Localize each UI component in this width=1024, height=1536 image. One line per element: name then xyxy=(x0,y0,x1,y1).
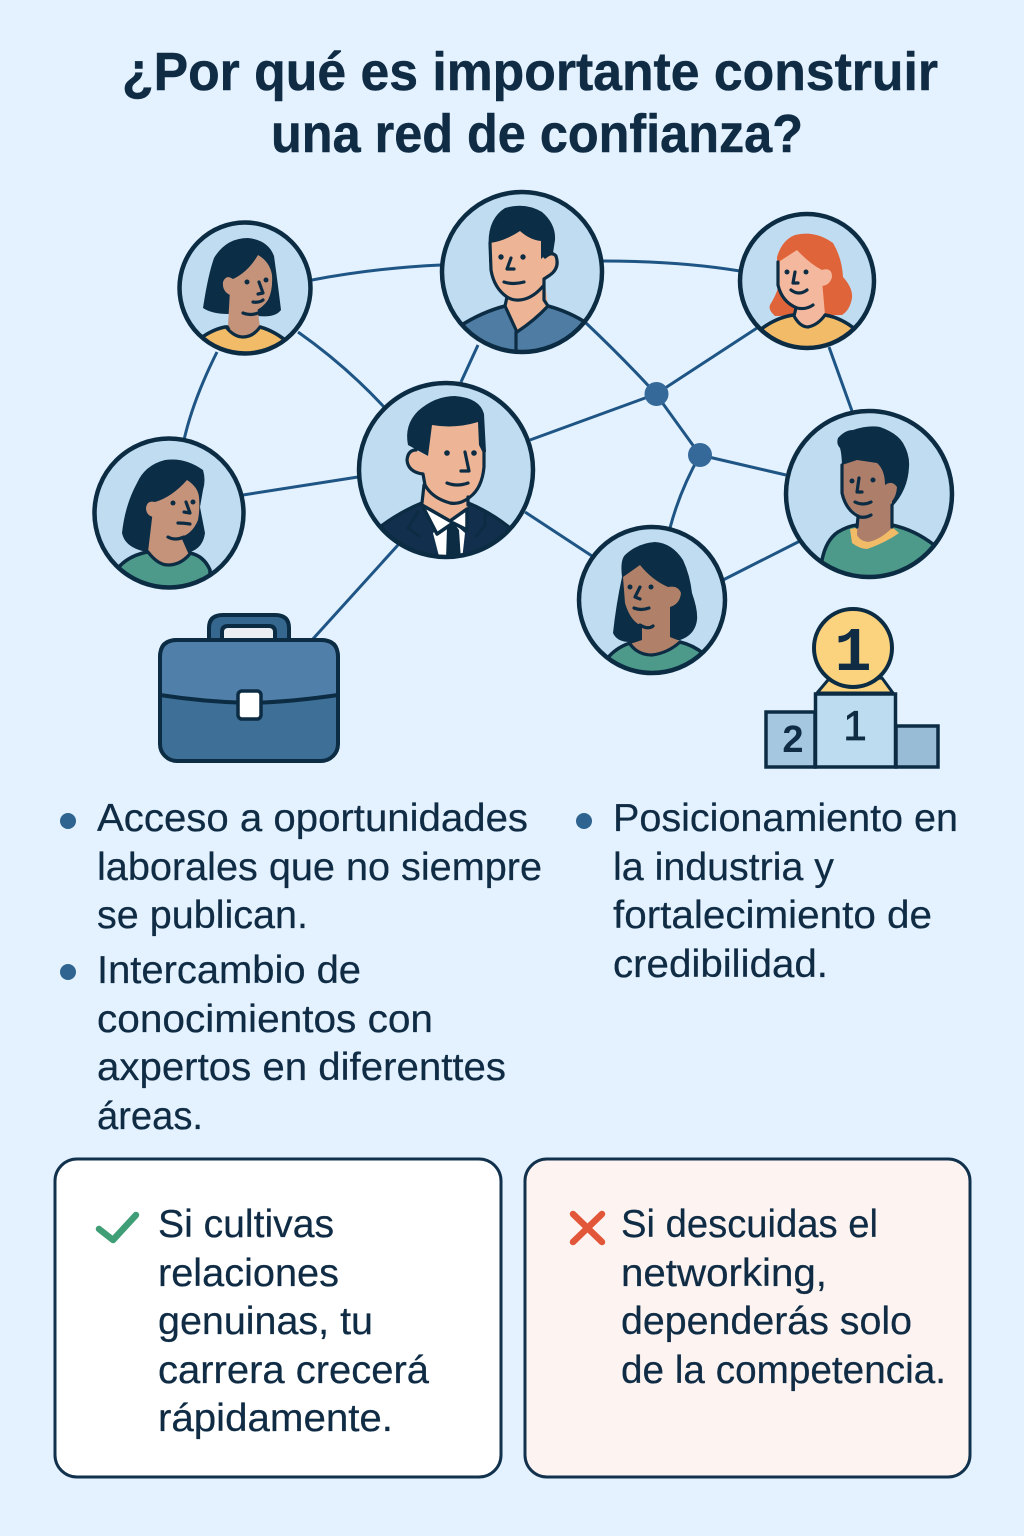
text: negative message xyxy=(621,1203,946,1392)
bullet item: right column xyxy=(576,797,958,986)
bullet item: oportunidades xyxy=(60,797,542,937)
avatar: woman bottom xyxy=(579,527,725,680)
network node 2 xyxy=(688,443,712,467)
bullet item: conocimientos: axpertos en diferenttes xyxy=(97,1046,506,1089)
bullet item: oportunidades: se publican. xyxy=(97,894,308,937)
bullet item: right column: fortalecimiento de xyxy=(613,894,932,937)
avatar: man center in suit xyxy=(359,383,533,570)
text: positive message: rápidamente. xyxy=(158,1397,393,1440)
text: negative message: dependerás solo xyxy=(621,1300,912,1343)
text: positive message xyxy=(158,1203,430,1440)
text: positive message: Si cultivas xyxy=(158,1203,334,1246)
bullet list: left column xyxy=(60,797,542,1138)
avatar: woman top left xyxy=(180,222,310,365)
avatar: man right xyxy=(786,411,952,590)
panel: negative outcome xyxy=(525,1159,970,1477)
title: una red de confianza? xyxy=(271,104,803,164)
avatar: red-haired woman xyxy=(740,214,874,355)
network connection lines xyxy=(184,261,852,640)
text: positive message: carrera crecerá xyxy=(158,1349,430,1392)
icon: briefcase xyxy=(160,615,338,761)
text: positive message: relaciones xyxy=(158,1252,339,1295)
bullet item: conocimientos: Intercambio de xyxy=(97,949,361,992)
text: negative message: Si descuidas el xyxy=(621,1203,878,1246)
title: ¿Por qué es importante construir xyxy=(122,42,938,102)
icon: check mark xyxy=(99,1215,136,1240)
icon: podium with medal: 1 xyxy=(843,702,867,749)
panel: positive outcome xyxy=(55,1159,501,1477)
icon: podium with medal: 1 xyxy=(834,618,872,689)
text: negative message: de la competencia. xyxy=(621,1349,946,1392)
icon: podium with medal xyxy=(766,609,938,767)
bullet item: conocimientos xyxy=(60,949,506,1138)
text: positive message: genuinas, tu xyxy=(158,1300,373,1343)
bullet item: oportunidades: Acceso a oportunidades xyxy=(97,797,528,840)
avatar: man top xyxy=(442,192,602,360)
bullet item: right column: credibilidad. xyxy=(613,943,828,986)
title xyxy=(122,42,938,164)
bullet item: conocimientos: áreas. xyxy=(97,1095,203,1138)
text: negative message: networking, xyxy=(621,1252,827,1295)
bullet item: right column: la industria y xyxy=(613,846,835,889)
bullet item: right column: Posicionamiento en xyxy=(613,797,958,840)
bullet item: oportunidades: laborales que no siempre xyxy=(97,846,542,889)
bullet item: conocimientos: conocimientos con xyxy=(97,998,433,1041)
icon: cross mark xyxy=(573,1214,602,1242)
icon: podium with medal: 2 xyxy=(782,719,804,761)
network node 1 xyxy=(644,382,668,406)
avatar: woman left xyxy=(94,438,244,600)
